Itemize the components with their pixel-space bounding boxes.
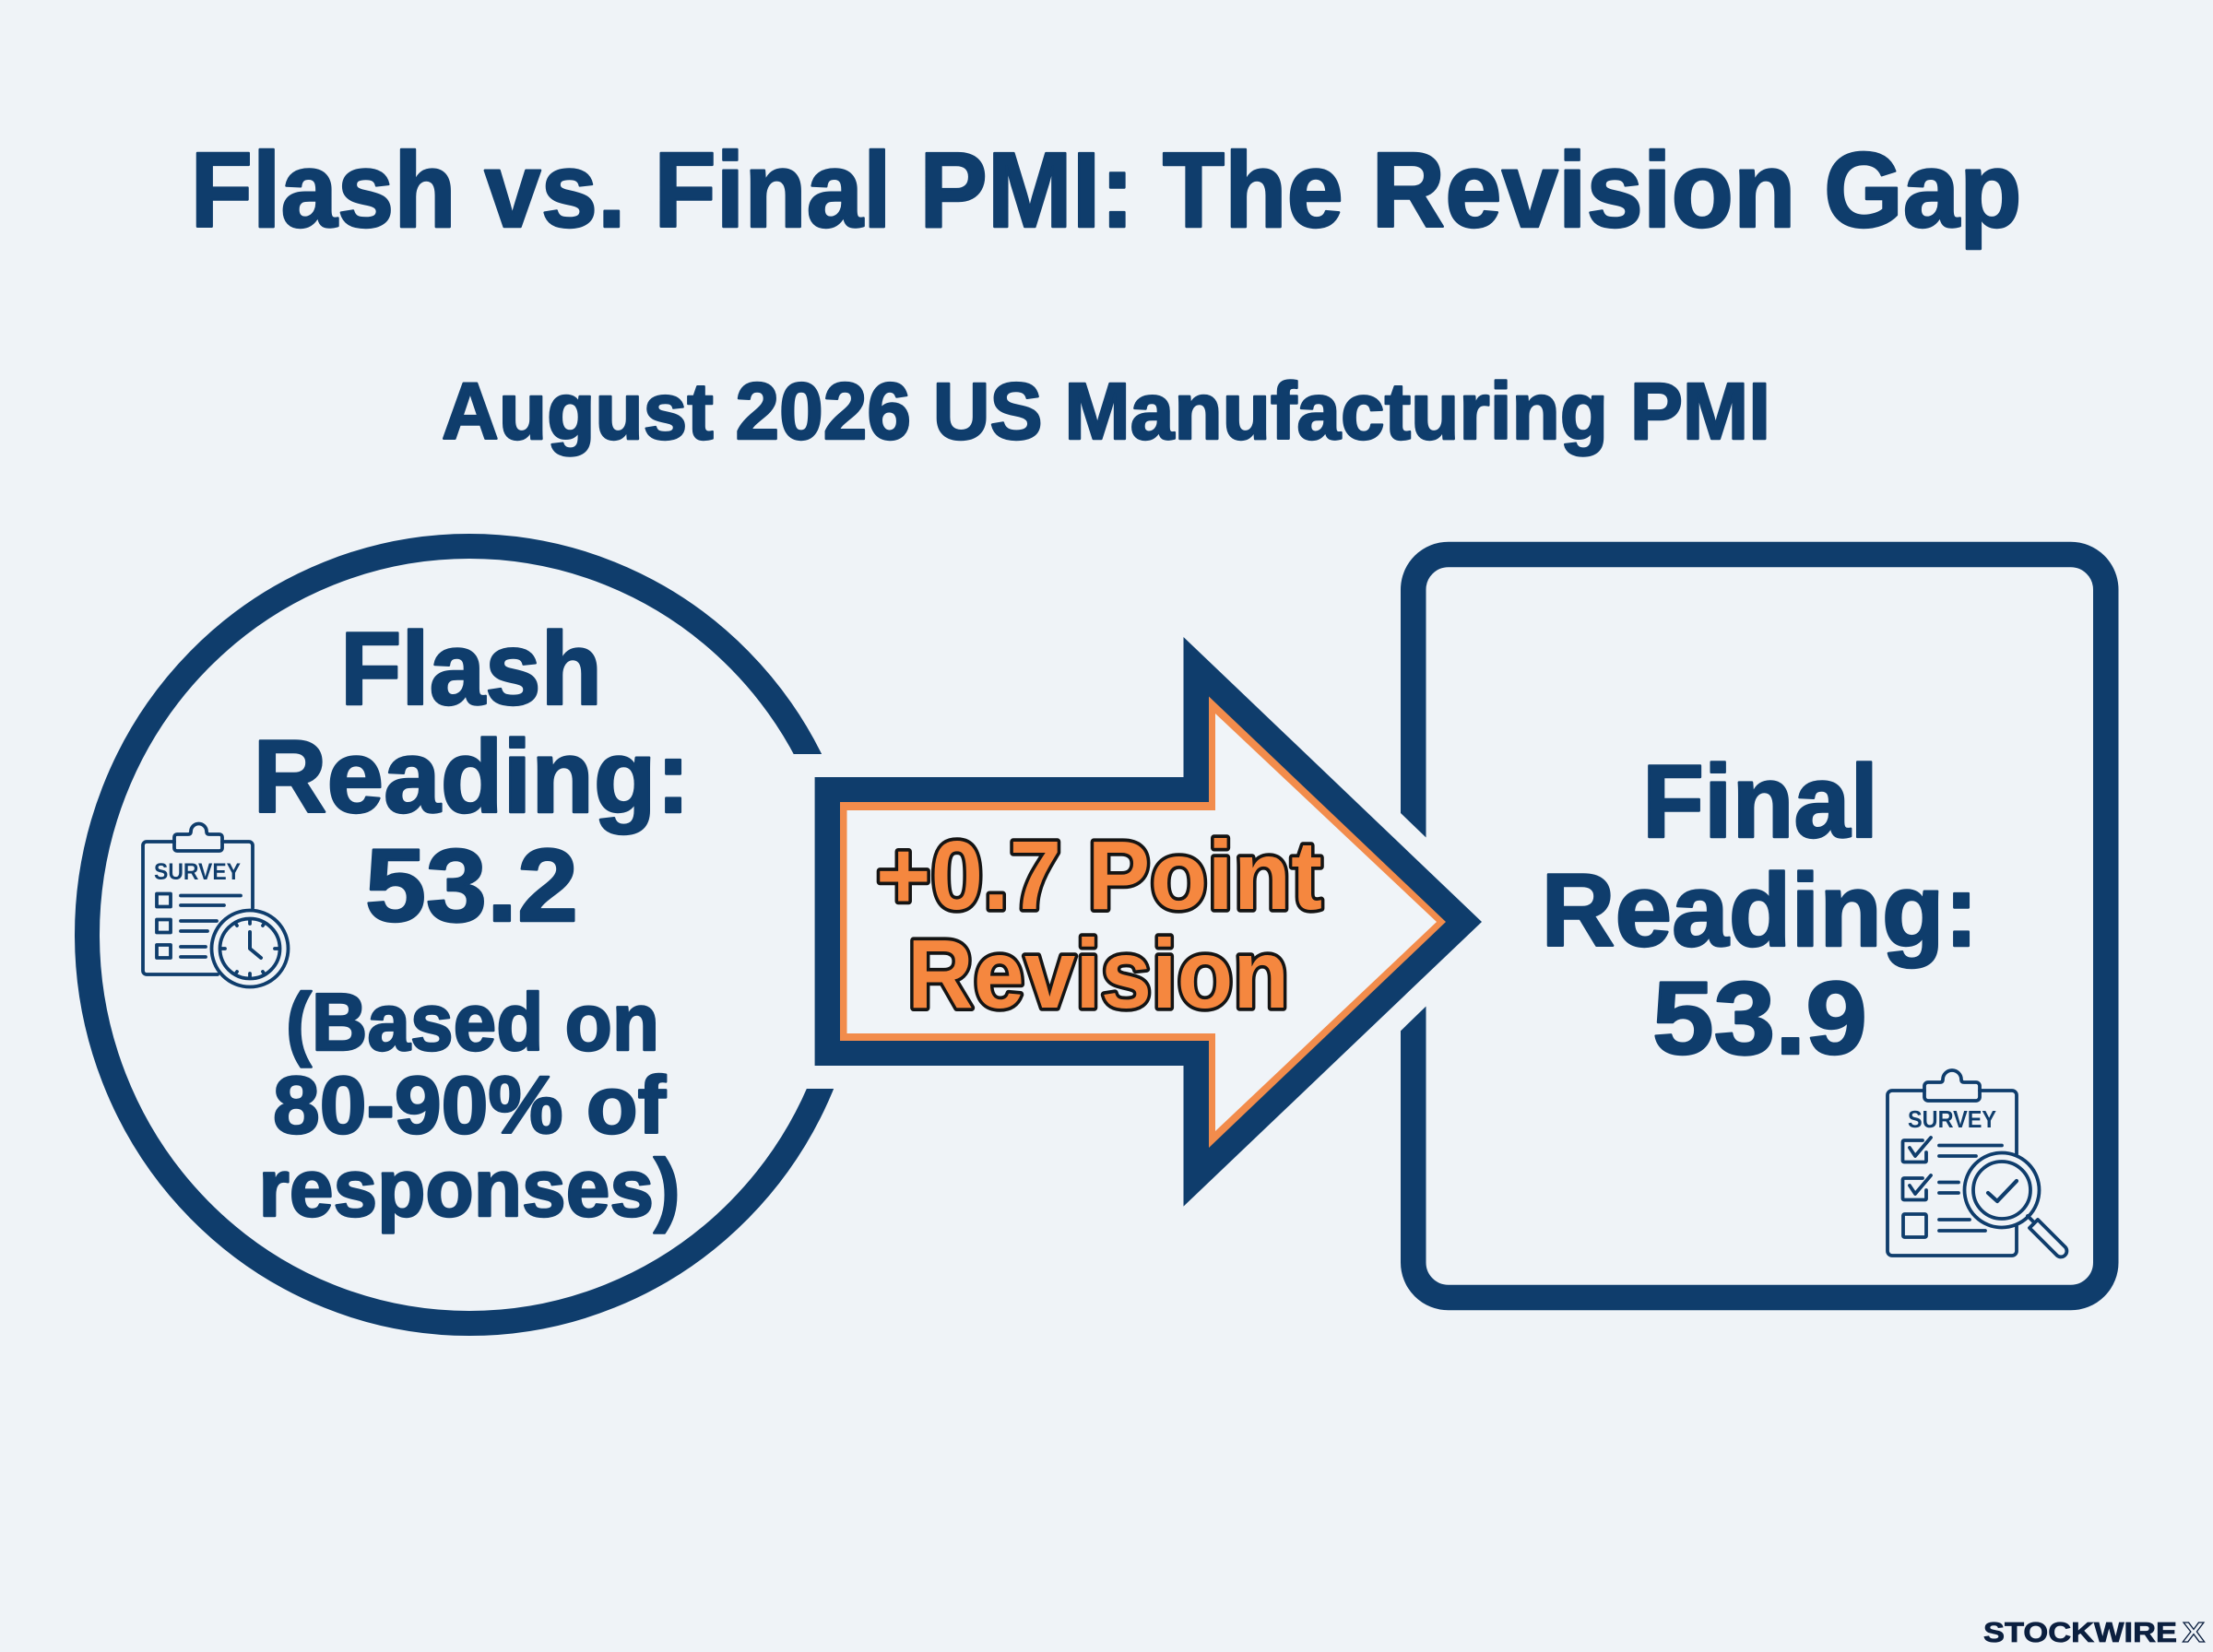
subtitle: August 2026 US Manufacturing PMI [442,367,1770,456]
flash reading text: 53.2 [365,828,578,943]
final reading text: 53.9 [1652,961,1867,1076]
revision callout text: +0.7 Point [876,821,1322,930]
watermark: X [2183,1616,2205,1648]
panel: flash reading circle [87,546,922,1324]
icon: survey clipboard with magnifier [1888,1070,2066,1257]
flash basis note: (Based on [286,976,659,1068]
flash reading text: Flash [340,611,602,726]
flash basis note: 80-90% of [273,1059,667,1150]
final reading text: Reading: [1542,853,1979,968]
final reading text [1542,744,1979,1076]
revision callout text: Revision [907,920,1289,1029]
flash basis note [258,976,680,1233]
icon: survey clipboard with magnifier: SURVEY [1908,1105,1996,1133]
flash reading text [253,611,690,943]
flash reading text: Reading: [253,719,690,834]
flash basis note: responses) [258,1142,680,1233]
watermark: STOCKWIRE [1983,1616,2177,1648]
title: Flash vs. Final PMI: The Revision Gap [190,130,2021,250]
panel: final reading rounded square [1392,555,2106,1298]
icon: survey clipboard with clock [143,824,288,986]
arrow: revision arrow [815,637,1482,1207]
final reading text: Final [1642,744,1878,859]
revision callout text [876,821,1322,1029]
icon: survey clipboard with clock: SURVEY [154,859,241,885]
